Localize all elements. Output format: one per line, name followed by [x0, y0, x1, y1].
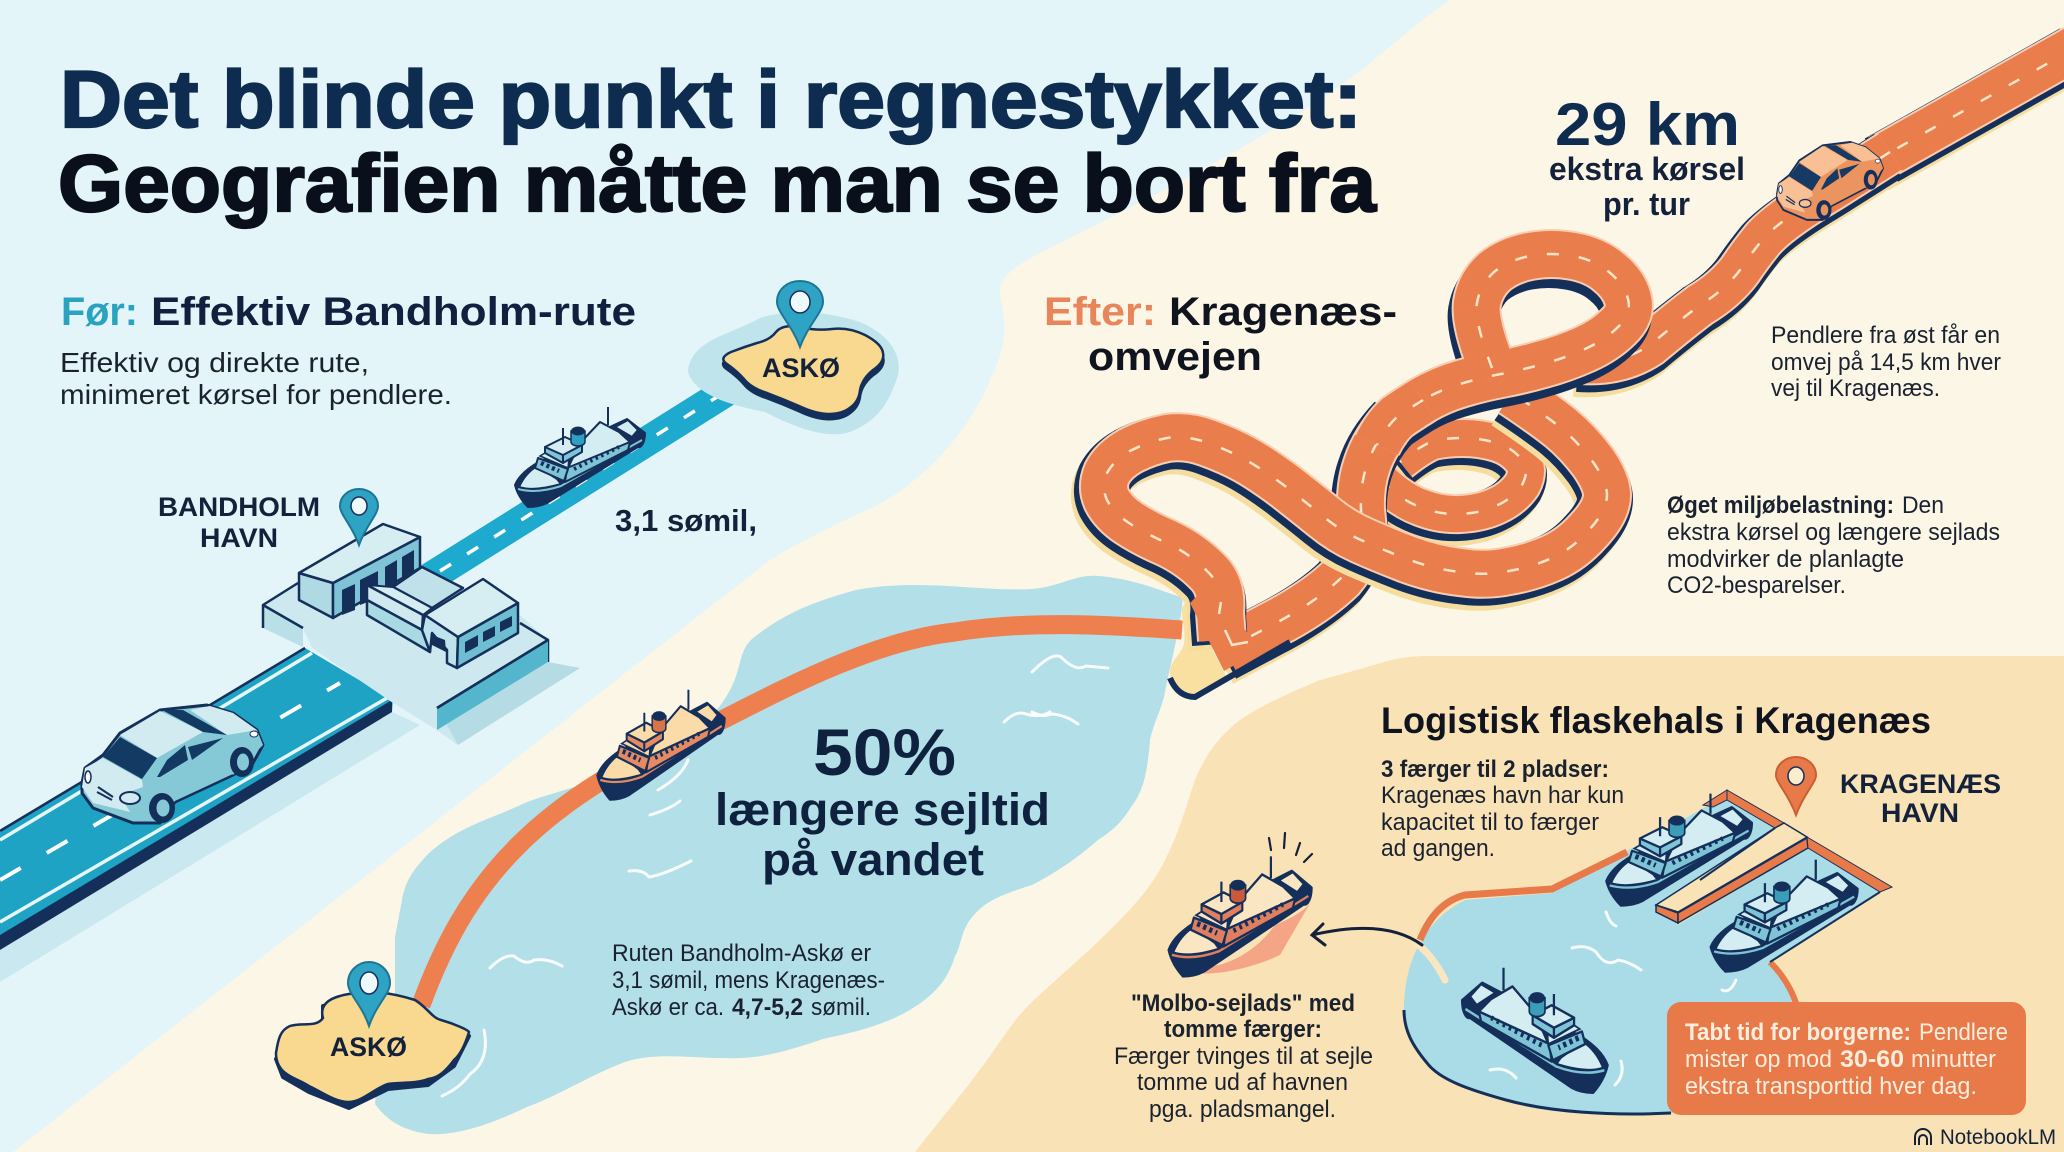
icon: orange ferry — [597, 690, 725, 800]
text: molbo-sejlads: "Molbo-sejlads" med — [1131, 990, 1355, 1017]
callout: tabt tid for borgerne: ekstra transporttid hver dag. — [1685, 1073, 1977, 1100]
icon: empty ferry shadow splash — [1172, 900, 1312, 974]
text: før description — [60, 347, 452, 410]
heading: før: Før: — [61, 290, 138, 334]
text: miljøbelastning: Den — [1902, 492, 1944, 519]
illustration: Kragenæs harbour basin — [1404, 790, 1892, 1114]
text: omvej: omvej på 14,5 km hver — [1771, 349, 2001, 376]
text: før description: minimeret kørsel for pendlere. — [60, 379, 452, 410]
heading: efter: Efter: — [1044, 290, 1156, 334]
heading: efter: Kragenæs- — [1169, 290, 1397, 334]
icon: molbo ferry with red hull — [1169, 856, 1312, 976]
waves in lake — [442, 656, 1108, 1096]
text: omvej: vej til Kragenæs. — [1771, 375, 1940, 402]
panel: logistics beige area — [915, 656, 2064, 1152]
heading: logistisk flaskehals: Logistisk flaskehals i Kragenæs — [1381, 700, 1931, 741]
stat: 29 km: ekstra kørsel — [1549, 151, 1745, 187]
title — [58, 55, 1377, 229]
text: molbo-sejlads — [1114, 990, 1373, 1123]
text: 3 færger til 2 pladser: ad gangen. — [1381, 835, 1495, 862]
callout: tabt tid for borgerne: minutter — [1911, 1046, 1996, 1073]
icon: ferry in right slot — [1711, 860, 1858, 972]
label: Bandholm havn: BANDHOLM — [158, 492, 320, 522]
label: Askø lower: ASKØ — [330, 1032, 407, 1062]
route: orange longer ferry line — [421, 625, 1182, 1005]
title: Det blinde punkt i regnestykket: — [60, 55, 1362, 145]
text: 3 færger til 2 pladser: 3 færger til 2 pladser: — [1381, 756, 1609, 783]
label: Kragenæs havn — [1840, 769, 2001, 828]
label: Bandholm havn — [158, 492, 320, 553]
stat: 50% længere sejltid — [715, 715, 1050, 885]
label: Bandholm havn: HAVN — [200, 523, 278, 553]
label: Kragenæs havn: HAVN — [1881, 798, 1959, 828]
heading: før: Effektiv Bandholm-rute — [151, 290, 636, 334]
icon: pin Askø lower — [348, 962, 390, 1026]
text: miljøbelastning — [1667, 492, 2000, 599]
illustration: Kragenæs shore beach — [1170, 600, 1226, 694]
text: rute sammenligning: sømil. — [811, 994, 871, 1021]
heading: efter — [1044, 290, 1397, 379]
stat: 50% længere sejltid: på vandet — [762, 834, 984, 885]
text: molbo-sejlads: Færger tvinges til at sejle — [1114, 1043, 1373, 1070]
text: omvej — [1771, 322, 2001, 402]
stat: 29 km: pr. tur — [1603, 186, 1690, 222]
callout: tabt tid for borgerne: 30-60 — [1840, 1046, 1904, 1073]
text: rute sammenligning: Askø er ca. — [612, 994, 724, 1021]
text: miljøbelastning: Øget miljøbelastning: — [1667, 492, 1894, 519]
icon: pin Bandholm — [340, 489, 378, 545]
label: Kragenæs havn: KRAGENÆS — [1840, 769, 2001, 799]
icon: pin Askø top — [777, 281, 823, 347]
callout: tabt tid for borgerne: mister op mod — [1685, 1046, 1832, 1073]
panel: lake (efter) — [375, 576, 1183, 1134]
stat: 29 km — [1549, 91, 1745, 222]
arrow: from harbour to empty ferry — [1312, 924, 1445, 980]
heading: efter: omvejen — [1088, 335, 1262, 379]
icon: ferry waiting in basin — [1462, 968, 1608, 1093]
text: rute sammenligning: Ruten Bandholm-Askø er — [612, 940, 871, 967]
stat: 3,1 sømil: 3,1 sømil, — [615, 503, 757, 538]
text: miljøbelastning: CO2-besparelser. — [1667, 572, 1846, 599]
logo: NotebookLM: NotebookLM — [1940, 1126, 2056, 1149]
text: rute sammenligning: 4,7-5,2 — [732, 994, 803, 1021]
text: omvej: Pendlere fra øst får en — [1771, 322, 2000, 349]
text: før description: Effektiv og direkte rute, — [60, 347, 369, 378]
illustration: Bandholm harbour buildings — [299, 524, 518, 668]
text: miljøbelastning: modvirker de planlagte — [1667, 546, 1904, 573]
island: Askø (lower) — [276, 992, 469, 1108]
text: molbo-sejlads: pga. pladsmangel. — [1149, 1096, 1336, 1123]
text: rute sammenligning: 3,1 sømil, mens Kragenæs- — [612, 967, 885, 994]
icon: ferry on direct route — [515, 407, 645, 507]
road: sharp turn at the shore — [1170, 588, 1290, 697]
text: molbo-sejlads: tomme færger: — [1164, 1016, 1322, 1043]
title: Geografien måtte man se bort fra — [58, 139, 1377, 229]
text: molbo-sejlads: tomme ud af havnen — [1137, 1069, 1348, 1096]
text: 3 færger til 2 pladser: kapacitet til to færger — [1381, 809, 1599, 836]
icon: alert lines above ferry — [1269, 833, 1312, 862]
stat: 29 km: 29 km — [1555, 91, 1740, 158]
icon: blue car — [82, 705, 263, 823]
stat: 50% længere sejltid: længere sejltid — [715, 784, 1050, 835]
stat: 50% længere sejltid: 50% — [813, 715, 956, 789]
route: direct ferry line Bandholm to Askø — [410, 378, 748, 590]
island: Askø (top) — [688, 312, 899, 434]
text: 3 færger til 2 pladser — [1381, 756, 1624, 862]
background: light blue sea (før) — [0, 0, 1450, 1152]
road: car road to Bandholm — [0, 648, 420, 982]
callout: tabt tid for borgerne: Tabt tid for borgerne: — [1685, 1019, 1911, 1046]
callout: tabt tid for borgerne: Pendlere — [1919, 1019, 2008, 1046]
road: winding Kragenæs detour — [1099, 48, 2064, 659]
icon: pin Kragenæs — [1776, 757, 1816, 815]
text: miljøbelastning: ekstra kørsel og længere sejlads — [1667, 519, 2000, 546]
illustration: Bandholm harbour platform — [263, 565, 580, 745]
callout: tabt tid for borgerne — [1667, 1002, 2026, 1115]
icon: orange car — [1777, 142, 1883, 220]
text: rute sammenligning — [612, 940, 885, 1021]
text: 3 færger til 2 pladser: Kragenæs havn har kun — [1381, 782, 1624, 809]
icon: ferry in top slot — [1606, 794, 1752, 906]
label: Askø: ASKØ — [762, 353, 840, 383]
